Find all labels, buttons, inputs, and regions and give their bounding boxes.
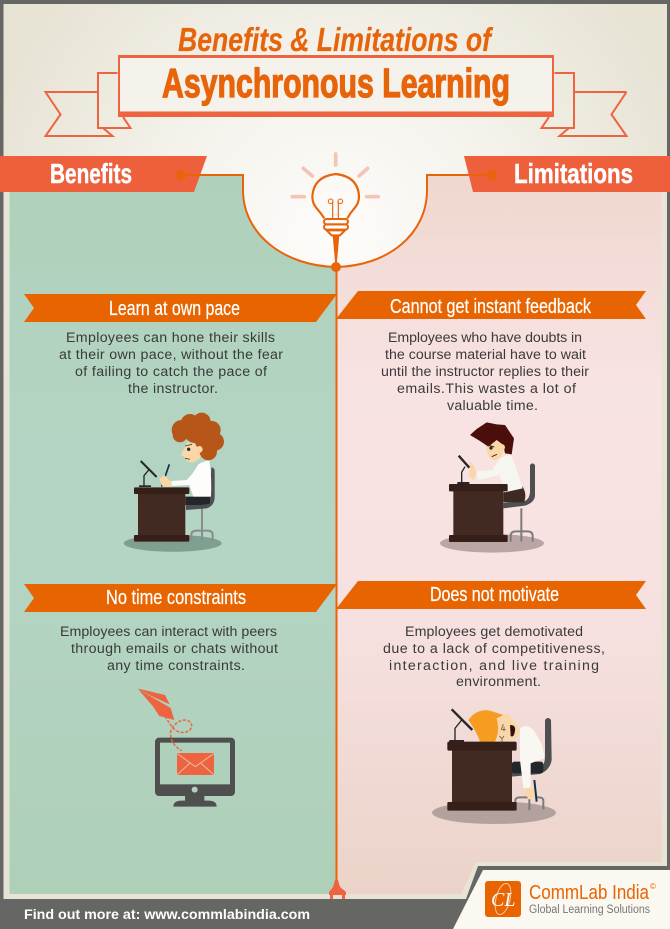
- body text: due to a lack of competitiveness,: [383, 641, 605, 657]
- body text: [383, 624, 605, 690]
- heading band: Cannot get instant feedback: [390, 296, 592, 318]
- body text: at their own pace, without the fear: [59, 347, 283, 363]
- node dot: [331, 262, 341, 272]
- illustration: frustrated learner: [440, 422, 544, 553]
- body text: interaction, and live training: [389, 658, 599, 674]
- body text: [60, 624, 278, 674]
- title line two: Asynchronous Learning: [162, 60, 510, 106]
- icon: logo mark: CL: [491, 889, 515, 911]
- logo panel: [453, 870, 670, 929]
- heading band: Does not motivate: [430, 584, 559, 606]
- body text: through emails or chats without: [71, 641, 278, 657]
- heading band: Learn at own pace: [109, 298, 240, 320]
- curved connector: [181, 175, 490, 267]
- panel: learn at own pace: [24, 294, 337, 397]
- limitations banner: [464, 156, 670, 192]
- heading band: [24, 294, 337, 322]
- panel: limitations background: [336, 175, 662, 894]
- panel: cannot get instant feedback: [336, 291, 646, 414]
- benefits banner: Benefits: [50, 158, 132, 189]
- body text: [59, 330, 283, 397]
- body text: the course material have to wait: [385, 347, 586, 363]
- body text: the instructor.: [128, 381, 218, 397]
- body text: Employees can interact with peers: [60, 624, 277, 640]
- title line one: Benefits & Limitations of: [178, 21, 493, 58]
- footer link: Find out more at: www.commlabindia.com: [24, 906, 310, 922]
- panel: benefits background: [10, 175, 336, 894]
- body text: emails.This wastes a lot of: [397, 381, 576, 397]
- body text: any time constraints.: [107, 658, 245, 674]
- body text: Employees get demotivated: [405, 624, 583, 640]
- panel: does not motivate: [336, 581, 646, 690]
- company name: CommLab India: [529, 882, 650, 904]
- icon: light bulb: [292, 154, 378, 265]
- heading band: [336, 291, 646, 319]
- heading band: No time constraints: [106, 587, 246, 609]
- illustration: demotivated learner: [432, 709, 556, 824]
- centre line: [336, 266, 338, 885]
- benefits banner: [0, 156, 207, 192]
- icon: logo mark: [485, 881, 521, 917]
- heading band: [24, 584, 337, 612]
- panel: no time constraints: [24, 584, 337, 674]
- title ribbon: [46, 55, 626, 136]
- body text: until the instructor replies to their: [381, 364, 589, 380]
- limitations banner: Limitations: [514, 158, 633, 189]
- body text: valuable time.: [447, 398, 538, 414]
- tagline: Global Learning Solutions: [529, 904, 650, 916]
- body text: environment.: [456, 674, 541, 690]
- body text: [381, 330, 589, 414]
- illustration: paper plane and monitor: [137, 688, 235, 807]
- body text: of failing to catch the pace of: [75, 364, 267, 380]
- icon: plug: [329, 880, 346, 900]
- illustration: curly haired learner: [124, 413, 224, 552]
- heading band: [336, 581, 646, 609]
- body text: Employees can hone their skills: [66, 330, 275, 346]
- footer bar: [0, 866, 670, 929]
- registered mark: ©: [650, 882, 656, 891]
- body text: Employees who have doubts in: [388, 330, 582, 346]
